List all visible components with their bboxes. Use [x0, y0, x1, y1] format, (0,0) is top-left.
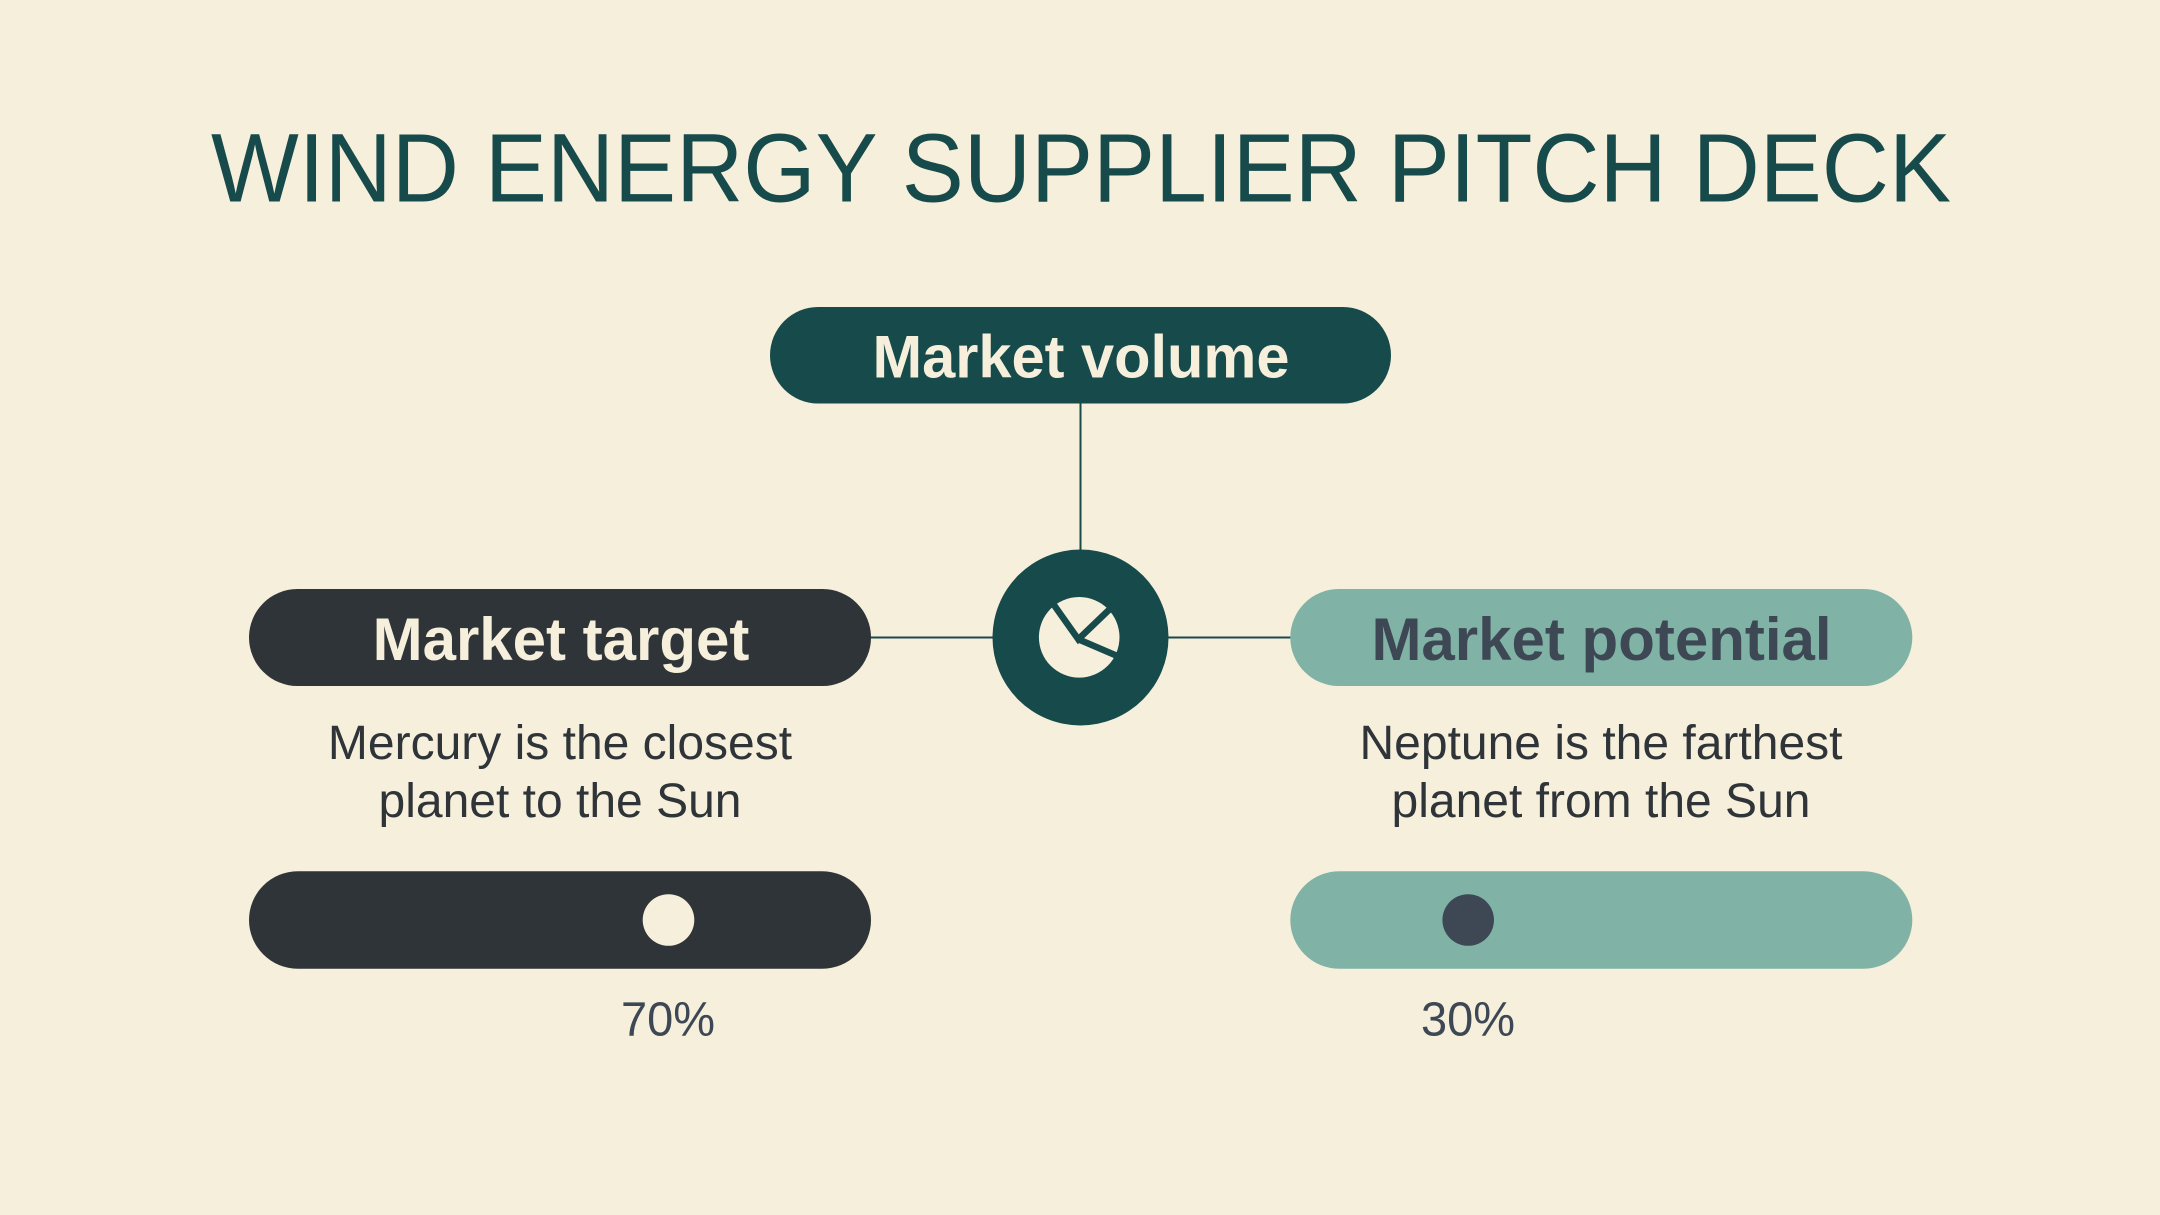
- connector: center icon to right pill: [1166, 636, 1292, 638]
- market target pill: Market target: [373, 606, 749, 673]
- market potential progress bar: [1290, 871, 1912, 969]
- panel: market volume pill: [770, 307, 1391, 404]
- market target description: planet to the Sun: [379, 775, 741, 828]
- market target description: Mercury is the closest: [328, 717, 792, 770]
- connector: top pill to center icon: [1080, 403, 1082, 552]
- panel: market target: [249, 589, 871, 1046]
- market potential description: planet from the Sun: [1392, 775, 1810, 828]
- title: WIND ENERGY SUPPLIER PITCH DECK: [211, 114, 1951, 222]
- market target pill: [249, 589, 871, 686]
- market target progress bar: [249, 871, 871, 969]
- market potential pill: Market potential: [1371, 606, 1832, 673]
- market potential percentage: 30%: [1421, 994, 1515, 1046]
- market potential description: Neptune is the farthest: [1360, 717, 1842, 770]
- panel: market volume pill: Market volume: [872, 324, 1290, 390]
- connector: left pill to center icon: [870, 636, 995, 638]
- market potential pill: [1290, 589, 1912, 686]
- icon: pie chart in circle: [992, 550, 1168, 726]
- market target percentage: 70%: [621, 994, 715, 1046]
- panel: market potential: [1290, 589, 1912, 1046]
